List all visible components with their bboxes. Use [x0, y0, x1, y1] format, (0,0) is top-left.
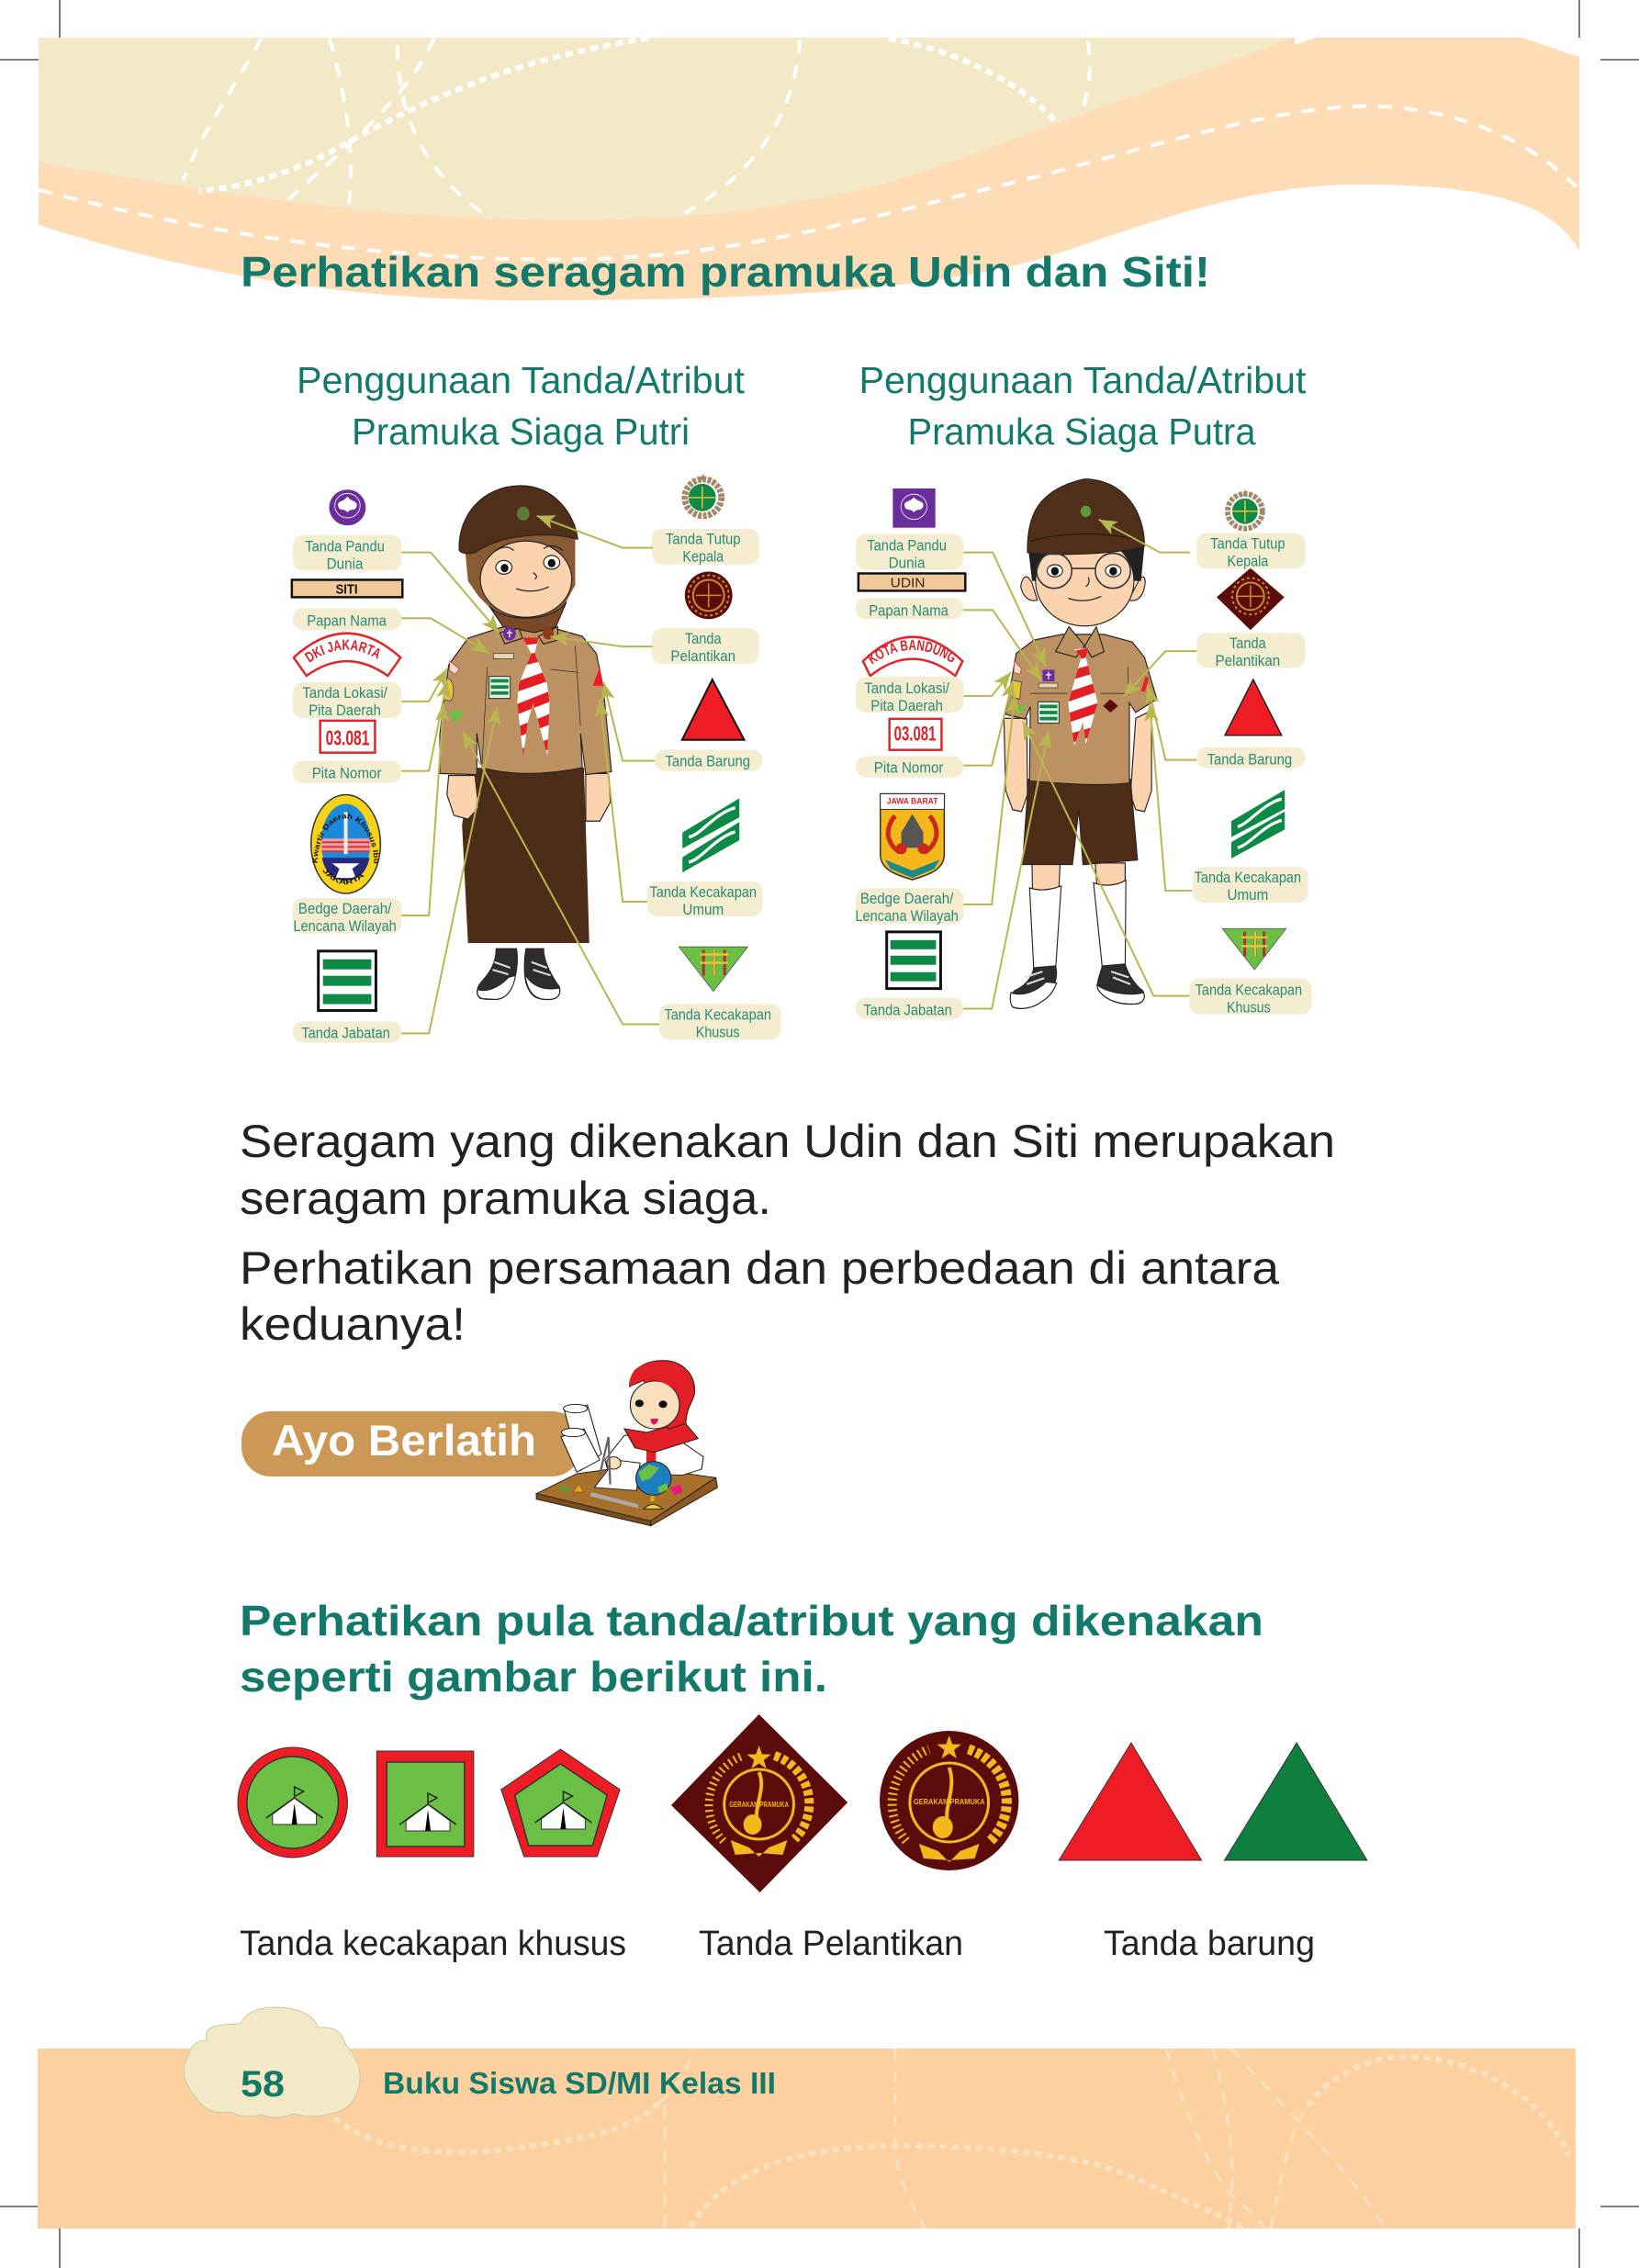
- text block: seragam paragraph: Perhatikan persamaan dan perbedaan di antara: [240, 1242, 1279, 1294]
- label: papan nama udin: [856, 598, 963, 619]
- icon: tanda kecakapan umum: [682, 798, 739, 872]
- icon: pita nomor: [320, 721, 375, 753]
- ayo berlatih banner: Ayo Berlatih: [272, 1416, 536, 1465]
- arrows: siti connectors: [401, 516, 659, 1033]
- triangle: red: [1059, 1743, 1202, 1860]
- icon: tanda barung udin: [1225, 679, 1282, 735]
- label: tanda pelantikan: [652, 628, 758, 665]
- icon: tanda jabatan udin: [887, 932, 940, 989]
- subheading: siaga putra: [859, 359, 1307, 453]
- icon: papan nama udin: [859, 573, 965, 590]
- label: papan nama udin: Papan Nama: [869, 601, 949, 619]
- label: bedge daerah: Bedge Daerah/: [298, 900, 392, 917]
- label: bedge daerah: [293, 898, 401, 935]
- label: tanda kecakapan khusus udin: Tanda Kecakapan: [1196, 982, 1302, 999]
- badge: pentagon: [501, 1749, 620, 1857]
- label: bedge daerah udin: [855, 888, 963, 925]
- badge: diamond: GERAKAN PRAMUKA: [729, 1801, 789, 1809]
- label: tanda tutup kepala udin: [1196, 533, 1306, 570]
- label: pita nomor: Pita Nomor: [312, 765, 382, 782]
- icon: tanda tutup kepala udin: [1228, 489, 1263, 529]
- text block: seragam paragraph: Seragam yang dikenakan Udin dan Siti merupakan: [240, 1116, 1335, 1167]
- label: tanda kecakapan khusus: Tanda Kecakapan: [664, 1005, 771, 1023]
- label: tanda pandu dunia: Dunia: [327, 556, 364, 573]
- ayo berlatih banner: [241, 1411, 581, 1476]
- captions: Tanda Pelantikan: [699, 1925, 963, 1963]
- label: tanda pelantikan udin: Pelantikan: [1216, 652, 1280, 669]
- heading: perhatikan pula: [240, 1597, 1263, 1701]
- badge: circle: GERAKAN PRAMUKA: [914, 1798, 985, 1806]
- figure: siti: [440, 486, 612, 1000]
- footer band: [38, 2049, 1576, 2229]
- label: tanda kecakapan umum: Umum: [682, 901, 724, 918]
- icon: tanda kecakapan khusus udin: [1222, 928, 1286, 970]
- label: tanda kecakapan khusus udin: Khusus: [1227, 999, 1271, 1016]
- captions: Tanda barung: [1104, 1925, 1315, 1963]
- label: tanda barung: Tanda Barung: [665, 753, 750, 770]
- captions: Tanda kecakapan khusus: [240, 1925, 626, 1963]
- label: tanda pelantikan: Pelantikan: [670, 647, 735, 665]
- panel: udin uniform diagram: [855, 478, 1311, 1019]
- label: tanda jabatan udin: Tanda Jabatan: [863, 1002, 952, 1019]
- icon: tanda pelantikan: [685, 571, 733, 619]
- subheading: siaga putri: [297, 359, 746, 453]
- label: tanda lokasi: Tanda Lokasi/: [302, 684, 387, 702]
- label: pita nomor udin: [856, 757, 963, 778]
- icon: tanda tutup kepala: [685, 474, 722, 516]
- badge: square: [376, 1751, 474, 1857]
- label: tanda kecakapan khusus: Khusus: [696, 1023, 740, 1040]
- icon: papan nama siti: [292, 579, 402, 597]
- title: Perhatikan seragam pramuka Udin dan Siti!: [241, 248, 1210, 296]
- label: tanda pelantikan: Tanda: [685, 630, 722, 647]
- label: tanda jabatan: Tanda Jabatan: [301, 1024, 390, 1041]
- icon: bedge daerah jakarta: JAKARTA: [323, 869, 365, 885]
- label: tanda lokasi: Pita Daerah: [309, 702, 381, 719]
- label: tanda pandu dunia udin: Dunia: [889, 555, 926, 572]
- text block: seragam paragraph: [240, 1116, 1335, 1350]
- subheading: siaga putra: Pramuka Siaga Putra: [907, 410, 1256, 453]
- illustration: girl at desk: [536, 1361, 717, 1526]
- label: bedge daerah udin: Lencana Wilayah: [855, 907, 959, 925]
- icon: bedge daerah jakarta: Kwartir Daerah Khusus Ibukota: [312, 814, 379, 863]
- label: tanda tutup kepala udin: Tanda Tutup: [1210, 535, 1285, 553]
- label: tanda lokasi udin: Tanda Lokasi/: [864, 679, 949, 697]
- icon: bedge jawa barat: [881, 793, 944, 880]
- icon: tanda barung: [682, 679, 745, 740]
- badge: circle: [880, 1731, 1018, 1870]
- heading: perhatikan pula: Perhatikan pula tanda/atribut yang dikenakan: [240, 1597, 1263, 1645]
- icon: bedge daerah jakarta: [310, 793, 382, 894]
- label: tanda pelantikan udin: [1196, 633, 1306, 669]
- label: tanda lokasi udin: Pita Daerah: [870, 697, 943, 714]
- label: tanda pandu dunia udin: [856, 534, 963, 572]
- icon: pita daerah dki jakarta: DKI JAKARTA: [305, 639, 380, 663]
- footer text: Buku Siswa SD/MI Kelas III: [383, 2066, 776, 2100]
- label: tanda pandu dunia: [293, 535, 401, 573]
- label: tanda kecakapan umum: Tanda Kecakapan: [650, 883, 757, 901]
- label: tanda kecakapan khusus: [659, 1005, 780, 1040]
- icon: tanda pandu dunia: [329, 489, 365, 525]
- icon: pita daerah kota bandung: [861, 635, 964, 678]
- figure: udin: [1004, 479, 1157, 1008]
- label: tanda lokasi udin: [856, 677, 963, 714]
- label: pita nomor: [293, 761, 401, 783]
- text block: seragam paragraph: keduanya!: [240, 1298, 466, 1350]
- label: tanda barung udin: Tanda Barung: [1207, 751, 1292, 769]
- label: tanda kecakapan umum udin: Umum: [1227, 886, 1268, 904]
- badge: circle: [238, 1747, 347, 1858]
- text block: seragam paragraph: seragam pramuka siaga.: [240, 1173, 771, 1224]
- label: tanda lokasi: [293, 682, 401, 719]
- icon: pita daerah dki jakarta: [292, 632, 402, 678]
- label: tanda kecakapan khusus udin: [1189, 979, 1312, 1016]
- label: tanda tutup kepala: Kepala: [682, 548, 724, 566]
- subheading: siaga putra: Penggunaan Tanda/Atribut: [859, 359, 1307, 401]
- subheading: siaga putri: Penggunaan Tanda/Atribut: [297, 359, 746, 401]
- icon group: tanda kecakapan khusus: [238, 1747, 620, 1858]
- icon: papan nama siti: SITI: [336, 581, 357, 597]
- label: pita nomor udin: Pita Nomor: [874, 759, 944, 777]
- icon: papan nama udin: UDIN: [891, 575, 926, 590]
- label: papan nama: [293, 608, 401, 630]
- label: bedge daerah: Lencana Wilayah: [293, 917, 397, 935]
- icon: pita nomor: 03.081: [326, 726, 370, 750]
- triangle: green: [1224, 1743, 1367, 1860]
- label: tanda tutup kepala: Tanda Tutup: [666, 531, 741, 548]
- cloud page badge: 58: [241, 2064, 285, 2105]
- icon group: tanda pelantikan: [671, 1714, 1018, 1892]
- heading: perhatikan pula: seperti gambar berikut ini.: [240, 1653, 827, 1701]
- label: tanda pandu dunia udin: Tanda Pandu: [867, 537, 947, 555]
- label: tanda tutup kepala udin: Kepala: [1227, 553, 1269, 570]
- label: papan nama: Papan Nama: [307, 612, 387, 629]
- icon: tanda kecakapan khusus: [679, 947, 747, 992]
- label: tanda kecakapan umum udin: [1193, 867, 1308, 904]
- icon: pita nomor udin: 03.081: [894, 723, 936, 746]
- icon: pita daerah kota bandung: KOTA BANDUNG: [867, 639, 956, 665]
- label: tanda kecakapan umum: [647, 881, 762, 918]
- subheading: siaga putri: Pramuka Siaga Putri: [352, 410, 690, 453]
- icon: tanda pelantikan wajik: [1217, 568, 1285, 630]
- icon: tanda kecakapan umum udin: [1231, 790, 1285, 859]
- arrows: udin connectors: [963, 520, 1196, 1009]
- label: tanda pelantikan udin: Tanda: [1229, 634, 1266, 652]
- panel: siti uniform diagram: [290, 474, 780, 1043]
- label: tanda kecakapan umum udin: Tanda Kecakapan: [1195, 869, 1301, 886]
- label: tanda pandu dunia: Tanda Pandu: [305, 538, 385, 556]
- badge: diamond: [671, 1714, 848, 1892]
- label: tanda tutup kepala: [652, 529, 758, 566]
- icon: pita nomor udin: [890, 719, 941, 750]
- captions: [240, 1925, 1315, 1963]
- header wave background: [39, 38, 1579, 300]
- icon group: tanda barung: [1059, 1743, 1367, 1860]
- icon: tanda jabatan: [319, 951, 376, 1011]
- icon: tanda pandu dunia persegi: [892, 488, 936, 528]
- icon: bedge jawa barat: JAWA BARAT: [887, 796, 938, 805]
- cloud page badge: [184, 2007, 360, 2117]
- label: bedge daerah udin: Bedge Daerah/: [860, 890, 954, 907]
